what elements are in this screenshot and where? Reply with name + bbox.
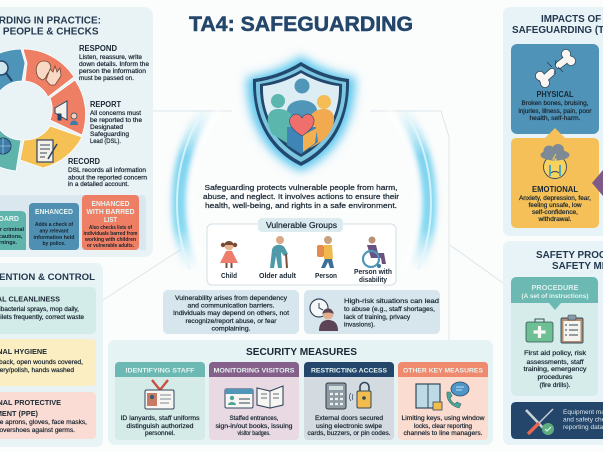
card: procedure: PROCEDURE [532, 283, 578, 292]
card: enhanced [29, 203, 79, 250]
card: enhanced: any relevant [40, 228, 69, 234]
card: equipment maintenance [511, 402, 603, 439]
icon: keypad and padlock [326, 382, 371, 409]
panel: safeguarding in practice [0, 7, 153, 257]
info box: vulnerability: Vulnerability arises from dependency [175, 295, 288, 302]
card: restricting access: RESTRICTING ACCESS [311, 368, 387, 374]
card: enhanced with barred list [82, 195, 139, 250]
panel: impacts of safeguarding [503, 7, 603, 236]
info box: high-risk situations [304, 290, 440, 334]
card: monitoring visitors: MONITORING VISITORS [214, 368, 295, 374]
card: enhanced with barred list: individuals barred from [84, 231, 138, 237]
heading: safeguarding in practice [0, 16, 101, 38]
icon: person with disability [363, 236, 386, 268]
card: monitoring visitors: visitor badges. [238, 430, 271, 437]
card: identifying staff: personnel. [145, 430, 175, 437]
panel: security measures [108, 340, 493, 445]
card: enhanced with barred list: working with children [84, 237, 136, 243]
icon: ID badge and lanyard [145, 380, 174, 409]
card: emotional: self-confidence, [532, 210, 578, 216]
labels: groups: Child [221, 273, 237, 280]
info box: high-risk situations: High-risk situations can lead [344, 298, 439, 305]
card: other key measures [398, 362, 488, 440]
card: enhanced with barred list: WITH BARRED [86, 209, 134, 216]
card: other key measures: locks, clear reporting [414, 423, 472, 430]
card: emotional: EMOTIONAL [532, 185, 578, 194]
card: physical: PHYSICAL [536, 90, 574, 99]
text: record [68, 157, 148, 188]
card: enhanced with barred list: or vulnerable adults. [87, 243, 135, 249]
intro paragraph [203, 183, 400, 210]
card: enhanced with barred list: Also checks lists of [89, 225, 132, 231]
card: procedure: training, emergency [524, 366, 587, 373]
icon: broken bone [535, 49, 576, 88]
text: respond: Listen, reassure, write [79, 54, 142, 61]
info box: vulnerability: and communication barriers. [188, 302, 275, 310]
text: report: be reported to the [90, 117, 143, 124]
card: identifying staff: ID lanyards, staff uniforms [120, 415, 200, 422]
title: TA4: SAFEGUARDING [189, 13, 413, 36]
icon: tools [526, 409, 554, 435]
card: monitoring visitors: Staffed entrances, [230, 415, 279, 422]
icon: window lock and phone [416, 382, 469, 410]
icon: first aid kit [526, 319, 553, 342]
card: restricting access: cards, buzzers, or pin codes. [308, 430, 391, 437]
connector lines [0, 111, 503, 340]
card: monitoring visitors: sign-in/out books, issuing [216, 423, 293, 430]
icon: safeguarding shield [247, 56, 355, 171]
card: environmental cleanliness [0, 287, 96, 334]
info box: vulnerability: Individuals may depend on others, not [173, 310, 289, 317]
text: respond: down details. Inform the [79, 61, 150, 68]
card: procedure [511, 277, 598, 396]
text: respond: RESPOND [79, 44, 117, 53]
text: record: RECORD [68, 157, 100, 166]
labels: groups: Older adult [259, 273, 297, 280]
card: enhanced: by police. [42, 241, 66, 247]
intro paragraph: health, well-being, and rights in a safe environment. [205, 201, 397, 210]
arrow: purple marker [592, 170, 603, 196]
card: emotional [511, 128, 599, 228]
panel: vulnerable groups [207, 218, 396, 285]
card: monitoring visitors [209, 362, 299, 440]
icon: ear and hand [36, 61, 61, 85]
panel: safety procedures [503, 241, 603, 445]
card: emotional: feeling unsafe, low [528, 203, 582, 209]
text: report: Safeguarding [90, 131, 130, 138]
card: physical: injuries, illness, pain, poor [518, 109, 592, 115]
card: equipment maintenance: reporting data [563, 424, 603, 431]
icon: older adult [270, 236, 288, 268]
card: procedure: First aid policy, risk [524, 350, 587, 357]
card: restricting access [304, 362, 394, 440]
text: report: All concerns must [90, 110, 141, 117]
card: emotional: Anxiety, depression, fear, [519, 196, 591, 202]
text: respond: must be passed on. [79, 75, 134, 82]
card: procedure: (fire drills). [540, 382, 571, 389]
info box: vulnerability: recognize/report abuse, or fear [186, 318, 276, 325]
heading: impacts [512, 14, 603, 36]
card: identifying staff: distinguish authorized [126, 423, 194, 430]
text: record: DSL records all information [68, 167, 147, 174]
heading: vulnerable groups: Vulnerable Groups [266, 221, 337, 230]
text: report: REPORT [90, 100, 121, 109]
card: emotional: withdrawal. [537, 217, 572, 223]
info box: high-risk situations: invasions). [344, 322, 375, 328]
chart: cycle [0, 49, 86, 171]
icon: globe [0, 138, 11, 154]
text: report: Lead (DSL). [90, 138, 121, 145]
card: personal hygiene [0, 339, 96, 386]
panel: DBS checks [0, 195, 146, 250]
labels: groups: Person with [354, 269, 392, 276]
card: identifying staff [115, 362, 205, 440]
text: report [90, 100, 143, 145]
icon: child [220, 241, 238, 268]
card: personal protective equipment [0, 392, 96, 439]
labels: groups [221, 269, 392, 284]
card: standard [0, 211, 26, 250]
icon: clipboard checklist [561, 315, 583, 343]
panel: infection prevention and control [0, 263, 103, 447]
labels: groups: Person [315, 273, 337, 280]
heading: security measures: SECURITY MEASURES [246, 346, 357, 358]
icon: storm cloud and crying face [540, 144, 570, 178]
icon: notepad and pen [37, 140, 57, 162]
icon: magnifier [0, 61, 12, 81]
central glow arcs [168, 110, 440, 270]
icon: person [317, 236, 334, 268]
card: enhanced: ENHANCED [35, 209, 73, 216]
card: identifying staff: IDENTIFYING STAFF [126, 368, 194, 374]
info box: high-risk situations: to abuse (e.g., staff shortages, [344, 306, 435, 313]
heading: impacts: IMPACTS OF [541, 14, 601, 25]
heading: vulnerable groups [258, 218, 343, 232]
info box: vulnerability [163, 290, 299, 334]
card: restricting access: using electronic swipe [316, 423, 382, 430]
card: enhanced with barred list: LIST [104, 217, 118, 224]
info box: vulnerability: complaining. [212, 326, 251, 332]
text: respond: person the information [79, 68, 147, 75]
labels: groups: disability [359, 277, 387, 284]
card: enhanced: information held [34, 235, 74, 241]
card: restricting access: External doors secured [315, 415, 383, 422]
intro paragraph: Safeguarding protects vulnerable people from harm, [204, 183, 398, 192]
card: other key measures: Limiting keys, using window [402, 415, 485, 422]
card: procedure: procedures [538, 374, 573, 381]
info box: high-risk situations: lack of training, privacy [344, 314, 411, 321]
intro paragraph: abuse, and neglect. It involves actions to ensure their [203, 192, 400, 201]
card: physical [511, 44, 599, 134]
text: report: Designated [90, 124, 124, 131]
icon: clock and worried person [310, 299, 338, 331]
text: record: in a detailed account. [68, 181, 129, 188]
card: other key measures: channels to line managers. [404, 430, 483, 437]
card: procedure: (A set of instructions) [522, 293, 588, 300]
card: enhanced: Adds a check of [35, 222, 73, 228]
card: enhanced with barred list: ENHANCED [92, 201, 130, 208]
card: other key measures: OTHER KEY MEASURES [403, 368, 483, 374]
icon: visitor badge and book [225, 386, 283, 408]
card: procedure: assessments, staff [526, 359, 584, 366]
text: record: about the reported concern [68, 174, 148, 182]
card: physical: health, self-harm. [530, 116, 581, 122]
text: respond [79, 44, 150, 82]
card: physical: Broken bones, bruising, [522, 101, 589, 107]
icon: megaphone and person [55, 101, 78, 125]
heading: safety procedures [536, 250, 603, 272]
